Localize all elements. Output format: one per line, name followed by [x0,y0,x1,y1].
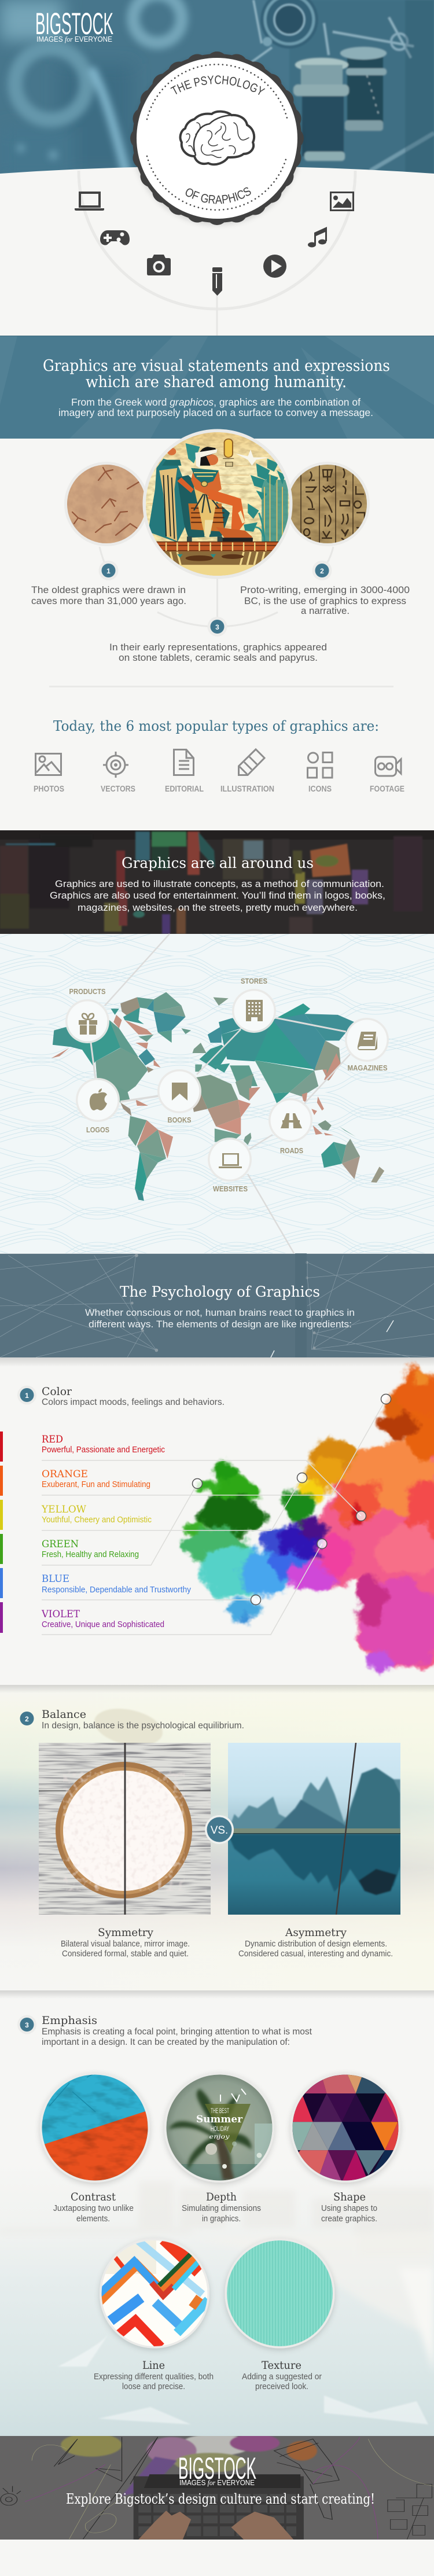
intro text [85,1307,355,1330]
asymmetry caption: Asymmetry [285,1927,347,1939]
caption: depth: Depth [206,2191,237,2203]
connecting lines [91,934,350,1253]
icon: music note [308,227,327,248]
asymmetry caption [238,1927,393,1959]
symmetry caption [61,1927,190,1959]
map node: websites [208,1138,252,1182]
caption: contrast [53,2191,134,2224]
heading [43,357,390,391]
caption: line: loose and precise. [122,2382,185,2391]
caption: line [94,2360,214,2391]
asymmetry caption: Considered casual, interesting and dynamic. [238,1949,393,1959]
image: colour ink splash [183,1368,434,1672]
cartouche [225,439,233,458]
image: hieroglyphs [290,462,370,546]
color bars [0,1431,3,1633]
section heading: color [42,1386,225,1407]
curved title top [174,84,260,95]
number badge 3: 3 [25,2021,29,2029]
badge: The Psychology of Graphics: OF GRAPHICS [185,187,251,204]
vs badge [205,1815,234,1844]
orange and pink body [299,1429,434,1668]
seated figure [191,468,222,496]
color: blue: Responsible, Dependable and Trustworthy [42,1585,192,1595]
section heading: emphasis: important in a design. It can be created by the manipulation of: [42,2037,290,2047]
section heading: emphasis: Emphasis is creating a focal point, bringing attention to what is most [42,2027,312,2037]
labels: FOOTAGE [370,785,404,794]
badge: The Psychology of Graphics [130,51,304,227]
icon: road [281,1113,302,1128]
labels [34,785,404,794]
number badge 1 [98,561,118,580]
color: yellow: YELLOW [41,1504,87,1515]
intro text [58,396,373,418]
icon: illustration [238,749,264,775]
number badge 2 [312,561,332,580]
caption: depth: Simulating dimensions [182,2203,261,2213]
color: green: Fresh, Healthy and Relaxing [42,1550,139,1559]
color: red: Powerful, Passionate and Energetic [42,1445,165,1455]
caption: texture [242,2360,322,2391]
icon: vectors [103,752,128,778]
caption: contrast: elements. [76,2214,110,2224]
caption: line: Expressing different qualities, both [94,2372,214,2382]
text: oldest graphics: caves more than 31,000 years ago. [31,595,186,606]
panel: color [0,1357,434,1685]
caption: shape: Using shapes to [321,2203,377,2213]
islands and australia [311,1096,384,1183]
icon: photos [36,753,61,775]
image: depth: Summer [196,2114,243,2125]
background stone [91,1703,166,1751]
labels: ICONS [308,785,332,794]
icon: gift [79,1014,97,1035]
map labels: STORES [241,977,267,985]
asymmetry caption: Dynamic distribution of design elements. [245,1939,387,1949]
green and cyan [212,1460,240,1485]
color: blue [42,1573,192,1595]
caption: depth: in graphics. [202,2214,241,2224]
color: violet [41,1609,164,1629]
map node: books [157,1069,201,1113]
image: depth: enjoy [209,2134,230,2140]
image: salt bowl, symmetry [39,1743,211,1915]
hero photo: vintage camera in teal duotone [0,0,434,179]
image: shape [290,2073,402,2183]
text: early representations: on stone tablets, ceramic seals and papyrus. [119,652,318,663]
map labels: PRODUCTS [69,987,106,996]
map node: logos [76,1078,120,1122]
caption: texture: Texture [262,2360,301,2372]
text: oldest graphics: The oldest graphics were drawn in [31,584,186,595]
icon: pencil [212,267,222,296]
symmetry caption: Bilateral visual balance, mirror image. [61,1939,190,1949]
caption: shape: create graphics. [321,2214,377,2224]
icon: footage [375,757,401,776]
image: line [98,2238,211,2349]
map labels: LOGOS [86,1125,109,1134]
text: proto-writing: Proto-writing, emerging in 3000-4000 [240,584,410,595]
labels: VECTORS [101,785,135,794]
caption: contrast: Juxtaposing two unlike [53,2203,134,2213]
vs badge: VS. [211,1824,228,1837]
image: depth: THE BEST [211,2107,229,2115]
chart: low-poly world map [52,992,384,1201]
icon: magazine [358,1032,377,1050]
body text: Graphics are used to illustrate concepts, as a method of communication. [55,878,384,889]
image: texture [225,2238,334,2348]
image: Egyptian papyrus [138,428,296,579]
greenland [147,992,191,1043]
timeline arc behind icons [79,171,355,309]
text: proto-writing [240,584,410,616]
south america [128,1116,173,1201]
panel: hero header [0,0,434,336]
intro text: different ways. The elements of design are like ingredients: [89,1319,352,1330]
logo: Bigstock [178,2452,256,2487]
vertical connector [216,294,218,336]
lotus plants [244,459,288,542]
icon: laptop [75,192,104,211]
color: violet: Creative, Unique and Sophisticated [42,1620,164,1629]
caption: depth [182,2191,261,2224]
icon: building [246,1000,263,1021]
image: karst lake, asymmetry [228,1743,400,1915]
number badge 1: 1 [25,1392,29,1400]
heading: which are shared among humanity. [86,373,347,391]
text: proto-writing: BC, is the use of graphics to express [244,595,406,606]
panel: graphics are all around us [0,830,434,934]
leader lines [42,1399,386,1635]
panel: hero header: BIGSTOCK [35,7,113,41]
caption: line: Line [142,2360,165,2372]
image: cave painting [64,460,150,547]
color: green [42,1539,139,1559]
throne [177,475,230,538]
color: yellow: Youthful, Cheery and Optimistic [42,1515,152,1525]
text: early representations: In their early representations, graphics appeared [109,642,327,653]
caption: contrast: Contrast [71,2191,116,2203]
number badge 3 [207,617,227,636]
caption: shape: Shape [333,2191,366,2203]
map labels: MAGAZINES [347,1063,388,1072]
color: orange [42,1469,150,1489]
icon: brain [181,112,254,164]
section heading: balance: In design, balance is the psychological equilibrium. [42,1721,244,1731]
panel: footer [0,2433,434,2540]
symmetry caption: Considered formal, stable and quiet. [62,1949,189,1959]
number badge 3 [17,2015,36,2034]
map labels: WEBSITES [213,1184,248,1193]
labels: ILLUSTRATION [220,785,274,794]
icon: laptop [219,1153,242,1168]
panel: the psychology of graphics banner [0,1253,434,1360]
panel: six types of graphics [34,718,404,794]
badge: The Psychology of Graphics: THE PSYCHOLOGY [170,75,265,95]
map node: products [65,999,109,1043]
map labels [69,977,388,1193]
number badge 2: 2 [320,567,324,575]
eurasia [193,998,354,1103]
left standing figure [148,459,185,542]
section heading: emphasis [42,2015,312,2047]
curved off-white base under hero [0,166,434,336]
icon: apple [90,1088,107,1110]
image: contrast [40,2071,150,2183]
map labels: ROADS [280,1146,303,1155]
icon: picture [330,192,354,211]
dotted rings [147,64,288,210]
color: green: GREEN [42,1539,79,1550]
intro text: imagery and text purposely placed on a surface to convey a message. [58,407,373,418]
connector lines [100,547,333,627]
north america [52,998,161,1116]
color: yellow [41,1504,152,1525]
number badge 2: 2 [25,1715,29,1723]
icon: bookmark [172,1083,187,1101]
color: orange: Exuberant, Fun and Stimulating [42,1480,150,1489]
color: orange: ORANGE [42,1469,88,1480]
number badge 2 [20,1712,34,1725]
heading: Graphics are all around us [122,855,314,871]
map node: stores [232,989,276,1033]
call to action: Explore Bigstock’s design culture and start creating! [66,2491,375,2507]
labels: EDITORIAL [165,785,204,794]
panel: balance [0,1685,434,1990]
text: early representations [109,642,327,663]
text: proto-writing: a narrative. [301,605,350,616]
logo: Bigstock: IMAGES for EVERYONE [179,2479,255,2487]
base bands [156,542,279,551]
icon: gamepad [100,230,130,245]
photo: designer at keyboard with sketches [0,2433,434,2540]
body text: Graphics are also used for entertainment. You’ll find them in logos, books, [50,890,385,901]
image: depth [164,2073,278,2185]
color: blue: BLUE [42,1573,69,1585]
section heading: color: Color [42,1386,72,1398]
icon: editorial [174,750,193,775]
yellow and ochre [311,1439,359,1470]
map node: magazines [345,1018,389,1062]
icons row [36,749,401,778]
section heading: color: Colors impact moods, feelings and behaviors. [42,1397,225,1407]
photo: neon street signs [0,830,434,934]
image: depth: HOLIDAY [211,2125,229,2133]
heading: The Psychology of Graphics [120,1283,320,1300]
icon: icons [308,752,332,778]
leader pins [192,1394,391,1605]
panel: emphasis [0,1990,434,2436]
color: violet: VIOLET [41,1609,80,1620]
body text [50,878,385,913]
icons around the arc [75,192,354,296]
curved title bottom [184,194,251,204]
heading: Today, the 6 most popular types of graphics are: [53,718,379,734]
symmetry caption: Symmetry [98,1927,154,1939]
caption: texture: Adding a suggested or [242,2372,322,2382]
labels: PHOTOS [34,785,64,794]
faded town and beach backdrop [0,2181,434,2372]
bird [236,450,270,466]
number badge 3: 3 [215,623,219,631]
icon: camera [147,255,171,275]
color: red [42,1434,165,1455]
panel: intro teal band [0,336,434,439]
intro text: From the Greek word graphicos, graphics are the combination of [71,396,361,408]
number badge 1: 1 [106,567,111,575]
section heading: balance [42,1709,244,1731]
logo: Bigstock: IMAGES for EVERYONE [36,35,112,43]
africa [191,1074,251,1145]
blue violet core [263,1528,296,1555]
panel: footer: BIGSTOCK [178,2452,256,2486]
network lines [0,1253,434,1360]
map node: roads [269,1098,312,1142]
text: oldest graphics [31,584,186,606]
icon: play button [263,255,286,278]
body text: magazines, websites, on the streets, pretty much everywhere. [78,902,358,913]
heading: Graphics are visual statements and expressions [43,357,390,375]
panel: early history images [31,428,410,663]
caption: shape [321,2191,377,2224]
logo: Bigstock [35,7,113,43]
color: red: RED [42,1434,63,1445]
intro text: Whether conscious or not, human brains react to graphics in [85,1307,355,1318]
map labels: BOOKS [168,1116,192,1124]
number badge 1 [17,1385,36,1405]
panel: world map [0,934,434,1253]
section heading: balance: Balance [42,1709,86,1721]
caption: texture: preceived look. [255,2382,308,2391]
section heading: emphasis: Emphasis [42,2015,97,2027]
